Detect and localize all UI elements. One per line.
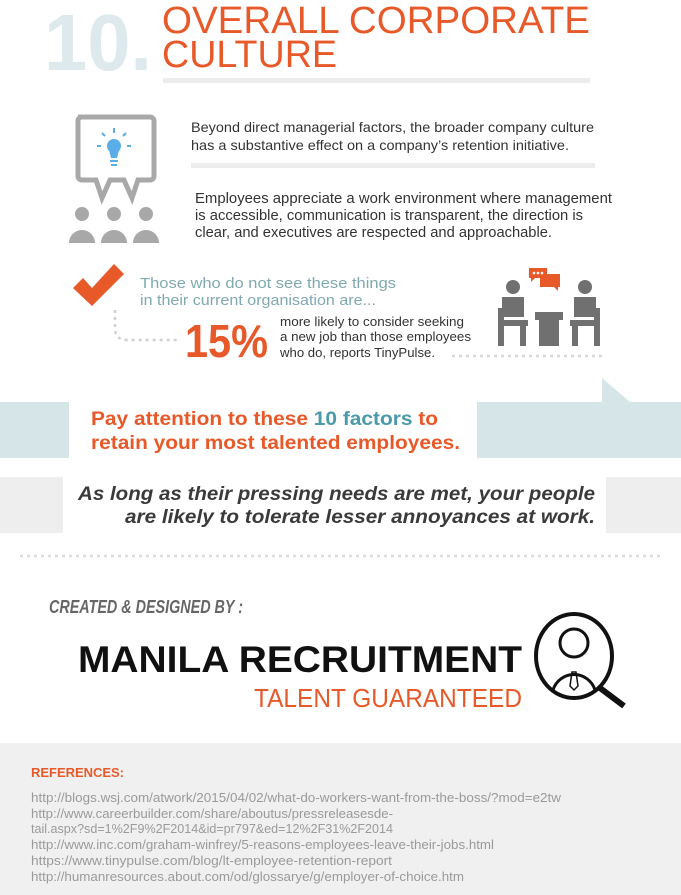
icon: idea presentation	[69, 117, 159, 243]
logo: manila recruitment: MANILA RECRUITMENT	[78, 639, 522, 680]
banner: pressing needs: are likely to tolerate lesser annoyances at work.	[125, 507, 595, 528]
panel: references: http://www.inc.com/graham-winfrey/5-reasons-employees-leave-their-jobs.html	[31, 838, 494, 852]
banner: pay attention: retain your most talented employees.	[91, 433, 460, 454]
stat: 15%: 15%	[185, 315, 268, 367]
text: stat description	[279, 314, 471, 360]
text block: employees appreciate: clear, and executives are respected and approachable.	[195, 225, 552, 241]
logo: manila recruitment: TALENT GUARANTEED	[254, 683, 522, 713]
icon: meeting	[498, 268, 600, 346]
logo: manila recruitment	[78, 639, 522, 713]
text block: intro	[191, 119, 594, 153]
text block: employees appreciate: is accessible, communication is transparent, the direction is	[195, 208, 583, 224]
text block: intro: Beyond direct managerial factors, the broader company culture	[191, 119, 594, 135]
text: those who do not	[140, 275, 396, 309]
panel: references	[0, 743, 681, 895]
panel: references: https://www.tinypulse.com/blog/lt-employee-retention-report	[31, 854, 393, 868]
text block: employees appreciate	[195, 191, 612, 241]
banner: pay attention: Pay attention to these 10 factors to	[91, 409, 438, 430]
panel: references: http://humanresources.about.com/od/glossarye/g/employer-of-choice.htm	[31, 870, 464, 884]
text block: employees appreciate: Employees appreciate a work environment where management	[195, 191, 612, 207]
title	[162, 0, 590, 76]
dotted connector	[115, 310, 179, 340]
panel: references: REFERENCES:	[31, 765, 124, 780]
banner: pay attention	[0, 378, 681, 458]
text: stat description: who do, reports TinyPulse.	[279, 345, 435, 360]
text: those who do not: in their current organisation are...	[140, 292, 376, 309]
text: stat description: more likely to consider seeking	[280, 314, 464, 329]
text block: intro: has a substantive effect on a company’s retention initiative.	[191, 137, 569, 153]
panel: references: tail.aspx?sd=1%2F9%2F2014&id=pr797&ed=12%2F31%2F2014	[31, 822, 393, 836]
title: OVERALL CORPORATE	[162, 0, 590, 42]
heading: created by: CREATED & DESIGNED BY :	[49, 597, 243, 617]
text: those who do not: Those who do not see these things	[140, 275, 396, 292]
banner: pressing needs: As long as their pressing needs are met, your people	[77, 484, 595, 505]
panel: references: http://www.careerbuilder.com/share/aboutus/pressreleasesde-	[31, 807, 393, 821]
icon: magnifier person	[536, 614, 624, 706]
title: CULTURE	[162, 34, 337, 76]
icon: checkmark	[73, 264, 124, 306]
title number: 10.	[44, 0, 152, 87]
text: stat description: a new job than those employees	[280, 329, 471, 344]
panel: references: http://blogs.wsj.com/atwork/2015/04/02/what-do-workers-want-from-the-boss/?mod=e2tw	[31, 791, 562, 805]
banner: pressing needs	[0, 477, 681, 533]
